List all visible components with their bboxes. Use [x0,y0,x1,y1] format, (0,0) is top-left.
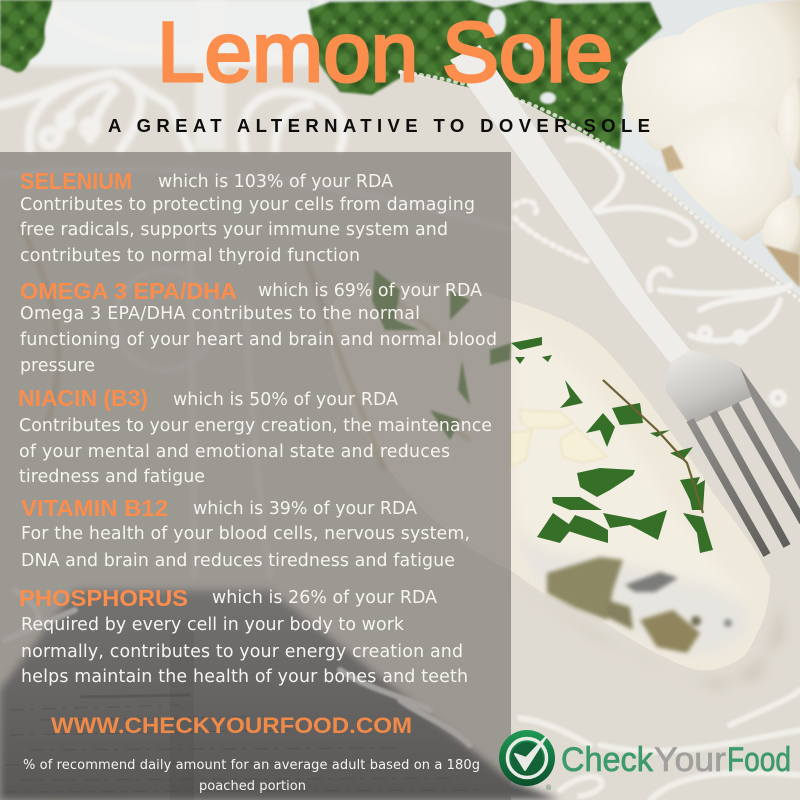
white blurred backdrop top left [0,0,800,310]
text block: selenium: Contributes to protecting your cells from damaging [20,195,475,215]
table at the bottom [0,590,560,800]
icon: fork [450,45,800,555]
text block: phosphorus: which is 26% of your RDA [212,588,437,608]
text block: vitamin b12: VITAMIN B12 [21,495,168,521]
icon: garlic bulbs [622,0,800,288]
plate ornaments right [515,139,790,404]
text block: selenium: which is 103% of your RDA [158,172,393,192]
text block: omega 3: which is 69% of your RDA [258,281,482,301]
logo wordmark: Your [654,741,726,779]
plate top rim [400,70,800,560]
registered mark: ® [546,784,552,792]
text block: niacin: of your mental and emotional state and reduces [19,442,450,462]
footnote [23,758,480,794]
icon: check badge [499,730,555,786]
text block: omega 3: OMEGA 3 EPA/DHA [20,278,237,304]
icon: parsley top centre [308,0,662,150]
text block: phosphorus: Required by every cell in your body to work [21,615,405,635]
text block: selenium: SELENIUM [20,168,132,194]
text block: vitamin b12 [21,495,470,571]
text block: selenium: free radicals, supports your immune system and [20,220,448,240]
text block: niacin: Contributes to your energy creation, the maintenance [19,416,492,436]
fish body [328,283,770,670]
text block: phosphorus [19,585,468,687]
subtitle: A GREAT ALTERNATIVE TO DOVER SOLE [108,115,650,136]
text block: niacin: which is 50% of your RDA [173,390,398,410]
cloth gaps in parsley [488,9,670,170]
panel: translucent grey text panel [0,152,511,800]
text block: selenium: contributes to normal thyroid function [20,246,360,266]
text block: omega 3 [20,278,497,376]
text block: niacin [18,385,492,487]
logo wordmark [561,741,791,779]
plate ornaments top left [0,0,343,150]
text block: niacin: NIACIN (B3) [18,385,148,411]
text block: vitamin b12: DNA and brain and reduces tiredness and fatigue [21,551,455,571]
garlic slices [511,410,607,467]
logo wordmark: Check [561,741,654,779]
parsley on fish [511,337,713,553]
text block: selenium [20,168,475,266]
text block: omega 3: Omega 3 EPA/DHA contributes to the normal [20,304,420,324]
text block: omega 3: functioning of your heart and brain and normal blood [20,330,497,350]
dark fish skin patches [547,557,732,653]
icon: parsley top left [0,0,52,72]
footnote: poached portion [199,779,306,794]
plate ornament bottom [5,590,800,800]
footnote: % of recommend daily amount for an average adult based on a 180g [23,758,480,773]
text block: vitamin b12: For the health of your blood cells, nervous system, [21,524,470,544]
fish under panel texture [20,225,470,470]
text block: niacin: tiredness and fatigue [19,467,205,487]
website url: WWW.CHECKYOURFOOD.COM [51,713,412,738]
logo: Check Your Food [499,730,791,792]
text block: phosphorus: helps maintain the health of your bones and teeth [21,667,468,687]
fork tines [690,404,800,555]
text block: omega 3: pressure [20,356,95,376]
fish shadow [510,580,785,690]
text block: phosphorus: PHOSPHORUS [19,585,188,611]
title: Lemon Sole [157,5,613,99]
text block: phosphorus: normally, contributes to your energy creation and [21,642,463,662]
text block: vitamin b12: which is 39% of your RDA [193,499,417,519]
